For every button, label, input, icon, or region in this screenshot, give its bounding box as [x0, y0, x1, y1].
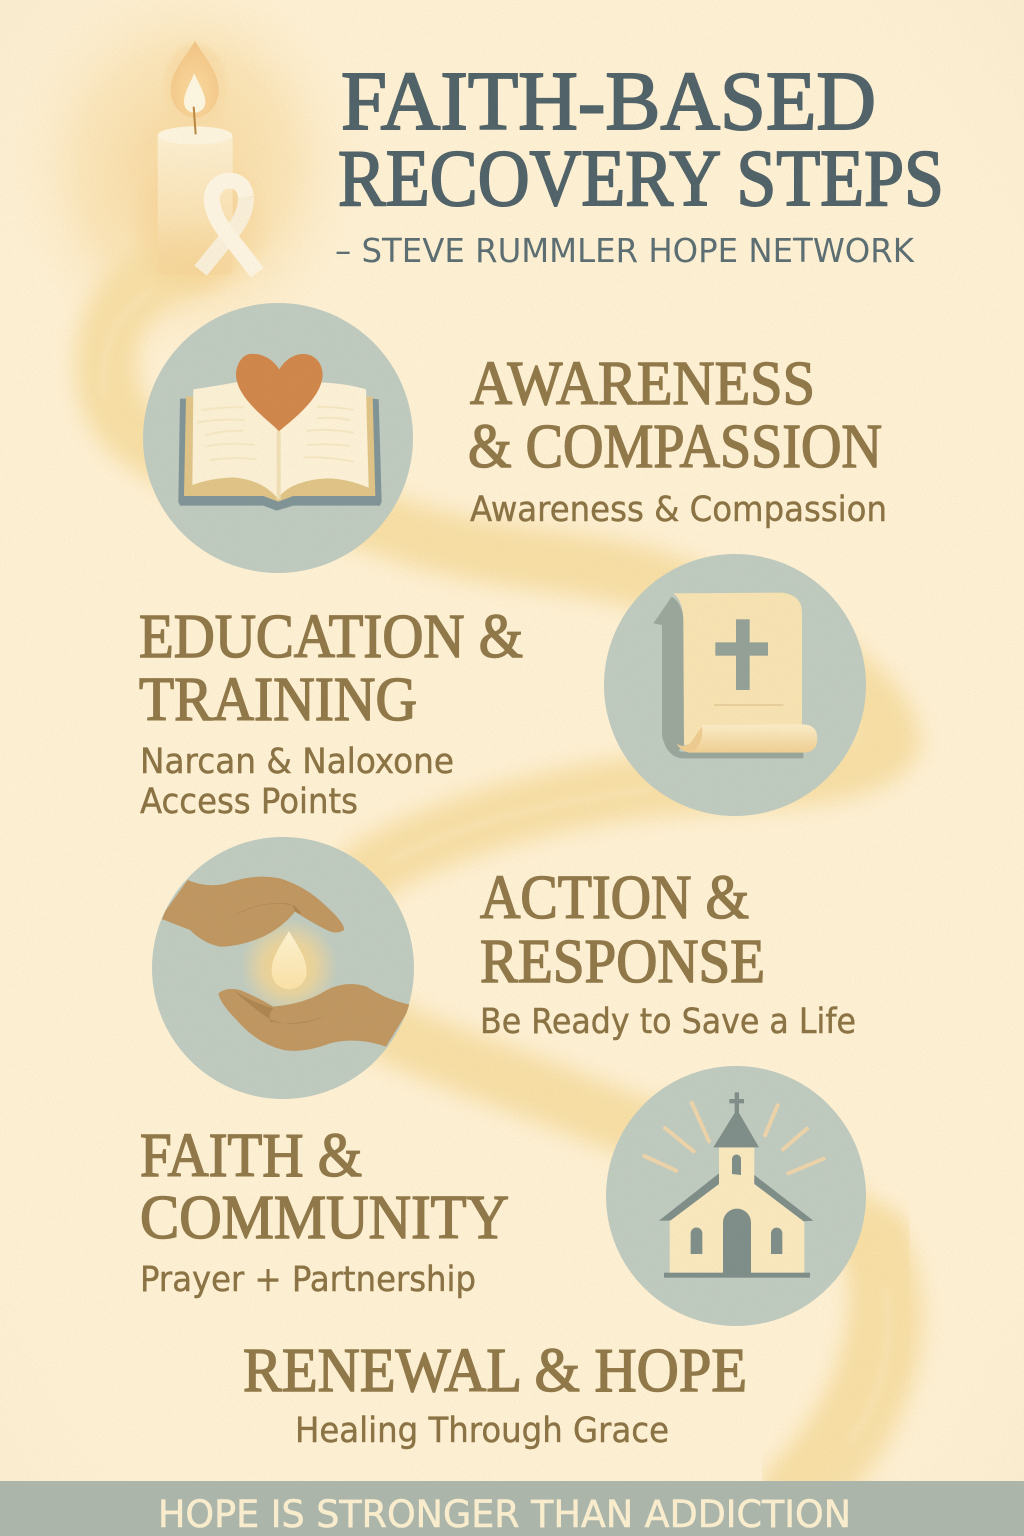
- glow: [241, 918, 337, 1015]
- text: action and response: ACTION &: [480, 864, 749, 932]
- awareness ribbon: [201, 181, 257, 273]
- icon: candle with ribbon: [158, 41, 257, 275]
- text: awareness and compassion: Awareness & Compassion: [470, 490, 887, 530]
- text: faith and community: Prayer + Partnership: [140, 1260, 476, 1300]
- text: education and training: EDUCATION &: [139, 603, 523, 671]
- text: action and response: Be Ready to Save a Life: [480, 1002, 856, 1042]
- circle: [152, 837, 414, 1099]
- drop: [272, 931, 307, 989]
- text: faith and community: FAITH &: [140, 1122, 362, 1190]
- text: action and response: [480, 864, 856, 1042]
- text: awareness and compassion: [468, 350, 887, 530]
- candle base glow: [125, 150, 275, 300]
- winding path ribbon: [103, 262, 892, 1490]
- banner: [0, 1481, 1024, 1536]
- flame core: [184, 73, 205, 113]
- panel: education icon: [604, 554, 866, 816]
- icon: scroll with cross: [653, 593, 817, 758]
- panel: faith icon: [606, 1066, 866, 1326]
- text: education and training: [139, 603, 523, 822]
- title: [335, 55, 944, 270]
- circle: [604, 554, 866, 816]
- text: awareness and compassion: & COMPASSION: [468, 413, 882, 481]
- panel: awareness icon: [143, 303, 413, 573]
- text: awareness and compassion: AWARENESS: [470, 350, 815, 418]
- candle top: [158, 126, 232, 144]
- text: renewal and hope: RENEWAL & HOPE: [243, 1337, 747, 1405]
- upper hand: [160, 877, 344, 947]
- candle body: [158, 133, 233, 275]
- circle: [143, 303, 413, 573]
- flame: [171, 41, 219, 118]
- icon: church with rays: [644, 1092, 824, 1278]
- text: action and response: RESPONSE: [480, 928, 765, 996]
- text: faith and community: [140, 1122, 509, 1300]
- text: renewal and hope: Healing Through Grace: [295, 1411, 669, 1451]
- title: RECOVERY STEPS: [338, 135, 944, 223]
- icon: hands with drop: [160, 877, 412, 1051]
- title: FAITH-BASED: [341, 55, 876, 148]
- flame glow: [163, 43, 227, 130]
- text: renewal and hope: [243, 1337, 747, 1451]
- icon: open book with heart: [178, 354, 382, 511]
- text: faith and community: COMMUNITY: [140, 1184, 509, 1252]
- subtitle: – STEVE RUMMLER HOPE NETWORK: [335, 231, 915, 270]
- lower hand: [218, 984, 412, 1051]
- text: education and training: TRAINING: [139, 666, 417, 734]
- text: education and training: Access Points: [140, 782, 358, 822]
- panel: action icon: [152, 837, 414, 1099]
- candle glow: [0, 0, 375, 375]
- text: education and training: Narcan & Naloxone: [140, 742, 454, 782]
- circle: [606, 1066, 866, 1326]
- wick: [194, 107, 196, 134]
- banner text: HOPE IS STRONGER THAN ADDICTION: [158, 1493, 851, 1536]
